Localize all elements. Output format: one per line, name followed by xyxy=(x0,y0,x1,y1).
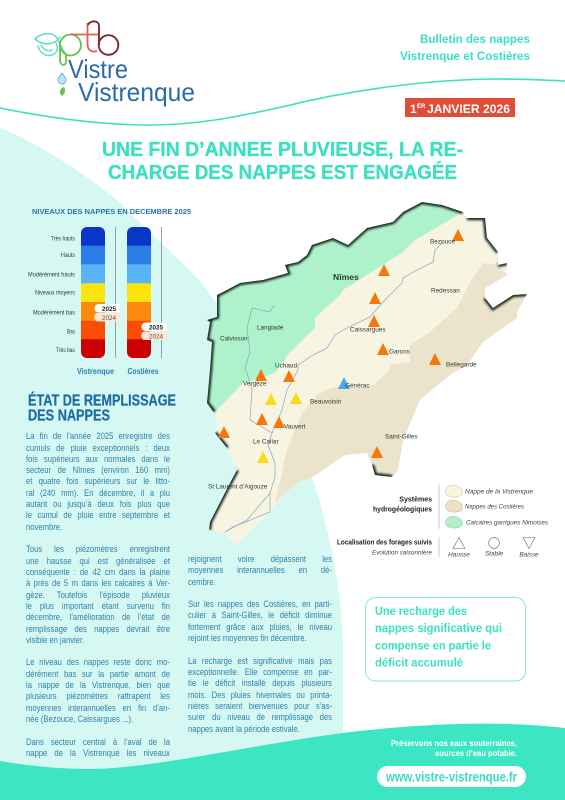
marker: Vistrenque 2025 / 2024 xyxy=(94,304,120,322)
text column 2: culier à Saint-Gilles, le déficit diminue xyxy=(188,610,332,620)
text column 2: rejoint les moyennes fin décembre. xyxy=(188,633,307,643)
map labels xyxy=(208,238,477,490)
header title: bulletin: Bulletin des nappes xyxy=(420,32,530,46)
level labels: Hauts xyxy=(61,252,75,259)
map labels: Le Cailar xyxy=(253,438,279,446)
map labels: Saint-Gilles xyxy=(385,434,418,440)
text column 2: fortement grâce aux pluies, le niveau xyxy=(188,622,332,632)
header title: bulletin: Vistrenque et Costières xyxy=(400,49,530,63)
level labels: Bas xyxy=(67,329,75,336)
text column 1: remplissage des nappes devrait être xyxy=(26,624,170,634)
level labels: Modérément bas xyxy=(33,310,75,316)
map labels: Générac xyxy=(345,382,370,390)
map label: Nîmes: Nîmes xyxy=(333,272,359,282)
text column 1: le cumul de pluie entre septembre et xyxy=(26,510,170,520)
text column 1: la nappe de la Vistrenque, bien que xyxy=(26,680,170,690)
main title: UNE FIN D’ANNEE PLUVIEUSE, LA RE- xyxy=(102,138,463,161)
level labels xyxy=(28,236,75,354)
bar: Vistrenque xyxy=(81,227,105,358)
legend: localisation des forages: Localisation des forages suivis xyxy=(337,540,432,546)
map triangles: hausse orange xyxy=(218,229,464,458)
map labels: Langlade xyxy=(257,324,284,332)
marker: Costières 2025 / 2024 xyxy=(141,322,167,340)
legend xyxy=(337,484,549,558)
map rivers xyxy=(225,242,443,532)
map labels: Bezouce xyxy=(430,238,455,246)
logo word Vistre: Vistre xyxy=(68,54,128,84)
marker: Vistrenque 2025 / 2024: 2025 xyxy=(102,306,117,313)
legend: localisation des forages: Baisse xyxy=(519,551,539,558)
header curve xyxy=(0,79,565,125)
marker: Costières 2025 / 2024: 2025 xyxy=(149,324,164,332)
text column 1: et quatre fois supérieurs sur le litto- xyxy=(26,476,170,486)
main title: CHARGE DES NAPPES EST ENGAGÉE xyxy=(108,161,457,184)
level labels: Très hauts xyxy=(51,236,75,242)
bar labels: Vistrenque xyxy=(77,366,114,376)
text column 1: le plus important étant survenu fin xyxy=(26,601,170,611)
text column 1: dérément bas sur la partie amont de xyxy=(26,669,170,679)
legend: localisation des forages: Hausse xyxy=(448,551,470,558)
text column 1: moyennes interannuelles en fin d’an- xyxy=(26,703,170,713)
text column 2: exceptionnelle. Elle compense en par- xyxy=(188,667,332,677)
map labels: Calvisson xyxy=(220,336,248,342)
header title: bulletin xyxy=(400,32,530,63)
text column 2: nappes avant la période estivale. xyxy=(188,724,300,734)
map labels: Redessan xyxy=(431,288,460,294)
legend: localisation des forages: Evolution saisonnière xyxy=(372,550,433,556)
text column 2: mois. Des pluies hivernales ou printa- xyxy=(188,690,332,700)
level labels: Très bas xyxy=(56,347,75,354)
section heading: DES NAPPES xyxy=(28,408,110,424)
map edge shadow xyxy=(207,202,527,530)
text column 1: cumuls de pluie exceptionnels : deux xyxy=(26,442,170,452)
legend: systèmes hydrogéologiques: Systèmes xyxy=(399,496,432,504)
map triangles: yellow xyxy=(257,392,302,463)
map labels: Caissargues xyxy=(350,326,386,334)
section heading: ÉTAT DE REMPLISSAGE xyxy=(28,392,176,410)
date badge: ER xyxy=(417,104,426,110)
map labels: Garons xyxy=(389,348,410,356)
map region: calcaires garrigues xyxy=(207,202,463,412)
text column 2: surer du niveau de remplissage des xyxy=(188,712,332,722)
legend: systèmes hydrogéologiques xyxy=(373,484,549,529)
map labels: St Laurent d’Aigouze xyxy=(208,484,268,490)
text column 1: fois supérieurs aux normales dans le xyxy=(26,454,170,464)
text column 1: décembre, l’amélioration de l’état de xyxy=(26,612,170,622)
marker: Vistrenque 2025 / 2024: 2024 xyxy=(102,315,117,322)
map region: Costières xyxy=(275,263,527,503)
bar labels xyxy=(77,366,159,376)
text column 2: La recharge est significative mais pas xyxy=(188,656,332,666)
legend: localisation des forages: Stable xyxy=(485,550,504,558)
bar: Costières xyxy=(127,227,151,358)
callout: compense en partie le xyxy=(375,638,491,652)
text column 2: moyennes interannuelles en dé- xyxy=(188,565,332,575)
footer band xyxy=(0,724,565,800)
text column 2: cembre. xyxy=(188,577,216,587)
date badge: 1 xyxy=(410,102,417,116)
text column 1: Tous les piézomètres enregistrent xyxy=(26,544,170,554)
map labels: Uchaud xyxy=(275,362,297,370)
text column 1: La fin de l’année 2025 enregistre des xyxy=(26,431,170,441)
logo: Vistre Vistrenque xyxy=(35,21,195,107)
legend: localisation des forages xyxy=(337,537,539,558)
text column 1: née (Bezouce, Caissargues ...). xyxy=(26,714,133,724)
footer slogan: Préservons nos eaux souterraines, xyxy=(391,738,517,748)
bar labels: Costières xyxy=(128,366,159,376)
text column 1: autant ou jusqu’à deux fois plus que xyxy=(26,499,170,509)
footer website pill xyxy=(377,766,526,787)
logo letter p xyxy=(60,34,81,65)
section heading xyxy=(28,392,176,424)
text column 1: secteur de Nîmes (environ 160 mm) xyxy=(26,465,170,475)
legend: systèmes hydrogéologiques: Calcaires garrigues Nimoises xyxy=(466,519,549,526)
map labels: Bellegarde xyxy=(446,362,477,368)
text column 1: ral (240 mm). En décembre, il a plu xyxy=(26,488,170,498)
text column 1: gèze. Toutefois l’épisode pluvieux xyxy=(26,590,170,600)
text column 1: Le niveau des nappes reste donc mo- xyxy=(26,657,170,667)
map labels: Vauvert xyxy=(284,424,306,430)
text column 1: conséquente : de 42 cm dans la plaine xyxy=(26,567,170,577)
date badge xyxy=(405,98,515,117)
text column 1: plusieurs piézomètres rattrapent les xyxy=(26,691,170,701)
level labels: Niveaux moyens xyxy=(35,290,75,296)
map triangle: blue xyxy=(338,377,350,389)
footer slogan xyxy=(391,738,517,758)
text column 1: nappe de la Vistrenque les niveaux xyxy=(26,748,170,758)
callout: déficit accumulé xyxy=(375,656,463,670)
footer website pill: www.vistre-vistrenque.fr xyxy=(385,768,517,784)
footer slogan: sources d’eau potable. xyxy=(435,748,517,758)
callout xyxy=(366,598,526,681)
level labels: Modérément hauts xyxy=(28,272,75,278)
callout: nappes significative qui xyxy=(375,621,502,635)
logo drop xyxy=(58,73,66,84)
legend: systèmes hydrogéologiques: Nappe de la Vistrenque xyxy=(465,488,533,495)
logo leaf xyxy=(60,87,65,96)
text column 1: une hausse qui est généralisée et xyxy=(26,556,170,566)
chart: niveaux des nappes xyxy=(28,207,192,376)
map labels: Vergèze xyxy=(243,380,267,388)
text column 2: nières seraient bienvenues pour s’as- xyxy=(188,701,332,711)
text column 1 xyxy=(26,431,170,758)
logo letter b xyxy=(88,21,118,55)
main title xyxy=(102,138,463,184)
text column 1: Dans secteur central à l’aval de la xyxy=(26,737,170,747)
legend: systèmes hydrogéologiques: Nappes des Costières xyxy=(465,503,525,510)
text column 2: Sur les nappes des Costières, en parti- xyxy=(188,599,332,609)
date badge: JANVIER 2026 xyxy=(427,102,510,116)
background panel: mint shape xyxy=(0,127,343,780)
text column 2 xyxy=(188,554,332,734)
text column 1: à près de 5 m dans les calcaires à Ver- xyxy=(26,578,170,588)
logo word Vistrenque: Vistrenque xyxy=(78,77,195,107)
text column 2: tie le déficit installé depuis plusieurs xyxy=(188,678,332,688)
map labels: Beauvoisin xyxy=(310,398,342,406)
map xyxy=(207,202,527,545)
chart title: NIVEAUX DES NAPPES EN DECEMBRE 2025 xyxy=(32,207,192,216)
map region: Vistrenque xyxy=(207,202,527,545)
logo swirl xyxy=(35,34,66,56)
text column 1: visible en janvier. xyxy=(26,635,84,645)
text column 2: rejoignent voire dépassent les xyxy=(188,554,332,564)
marker: Costières 2025 / 2024: 2024 xyxy=(149,333,164,340)
legend: systèmes hydrogéologiques: hydrogéologiques xyxy=(373,506,432,514)
text column 1: novembre. xyxy=(26,522,62,532)
callout: Une recharge des xyxy=(375,604,467,618)
logo letter t xyxy=(70,23,99,52)
